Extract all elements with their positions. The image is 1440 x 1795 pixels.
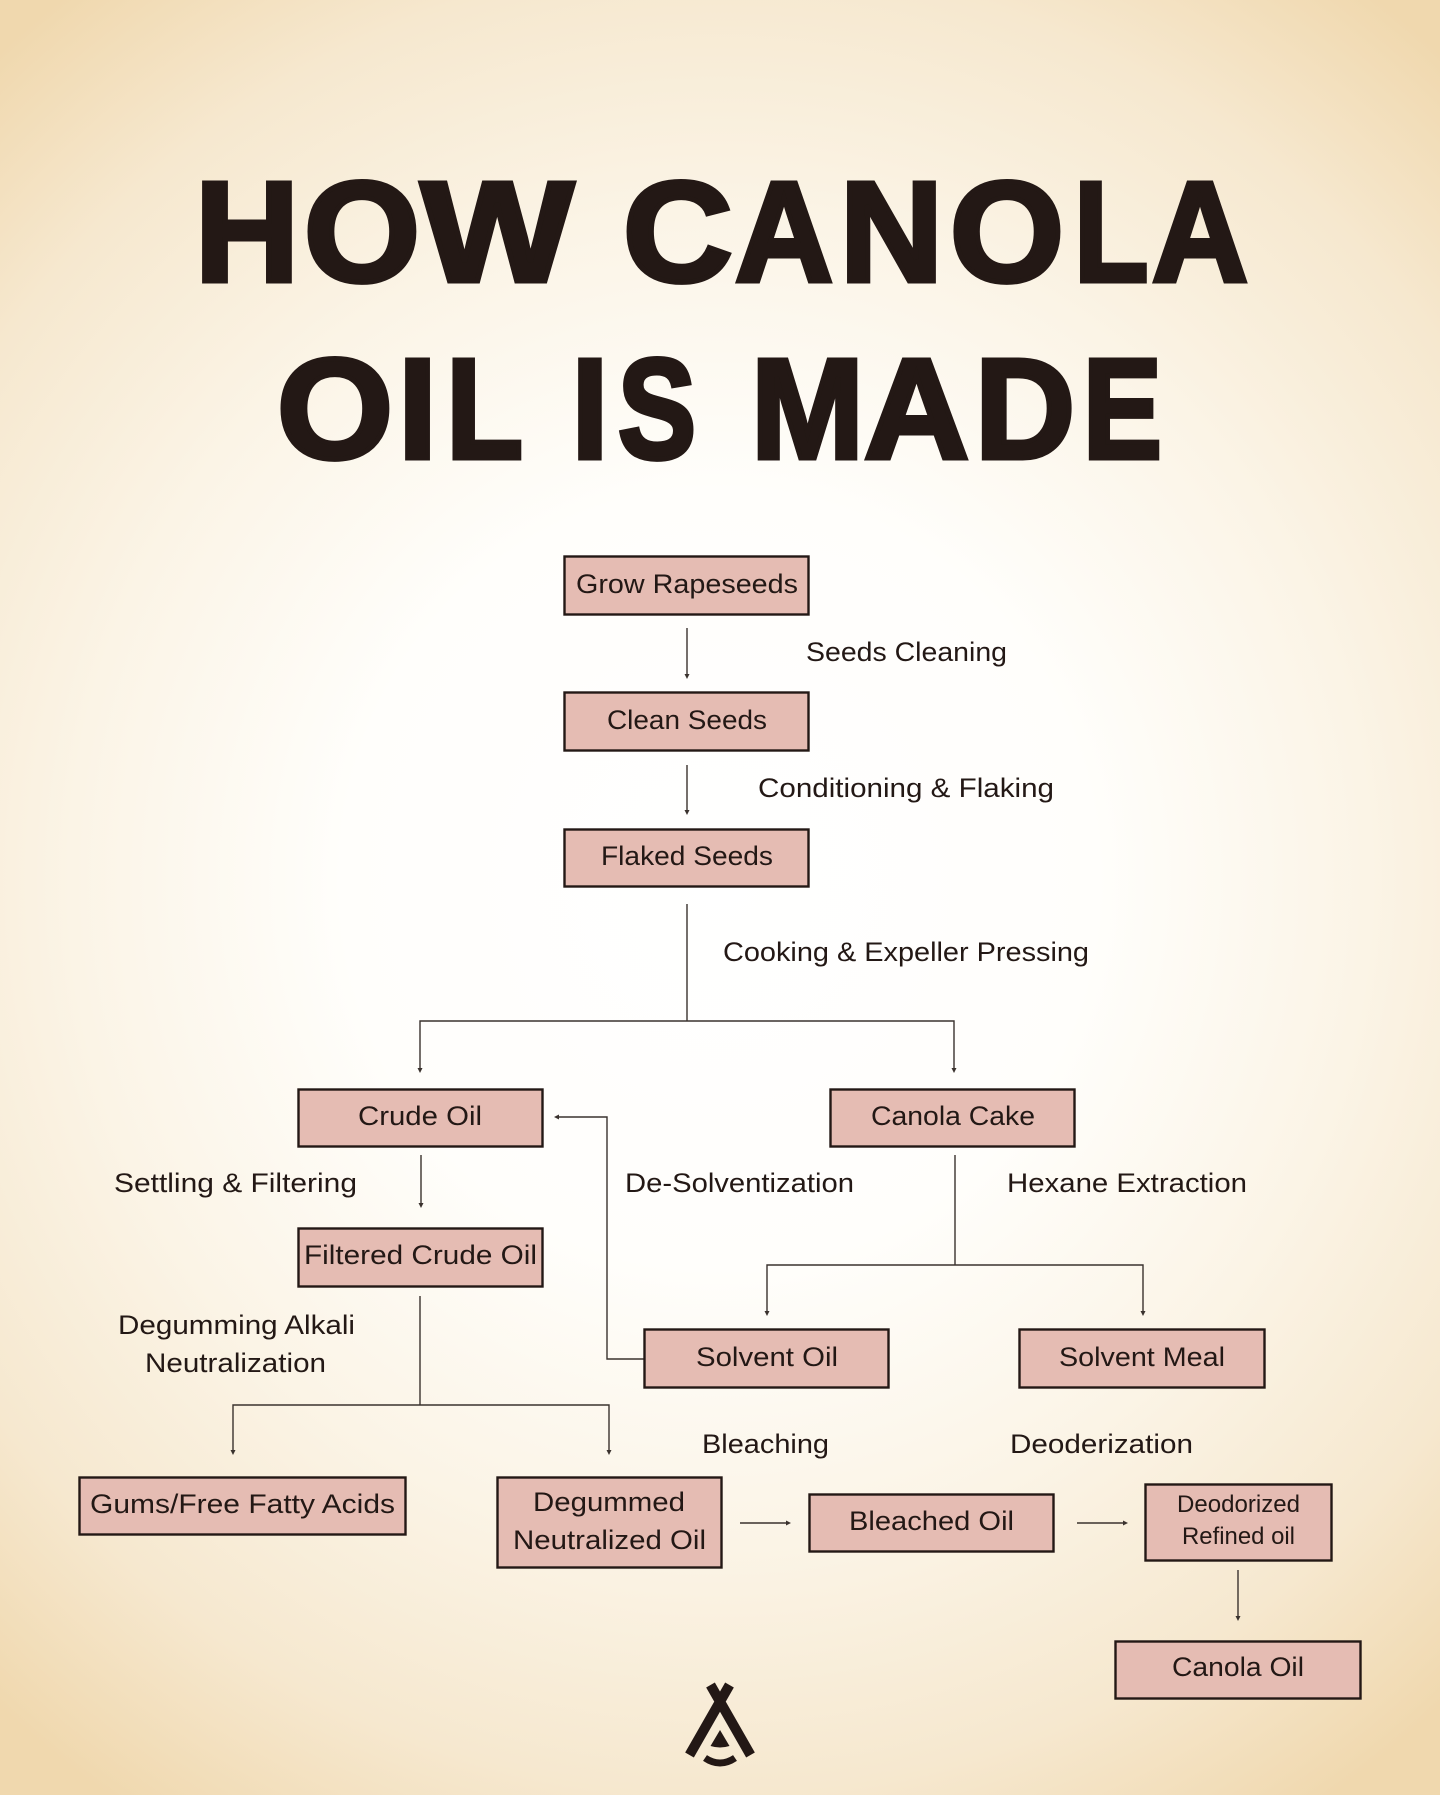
title: D (975, 330, 1075, 489)
label: Degumming Alkali Neutralization (118, 1310, 355, 1378)
title: N (840, 153, 943, 312)
box: Degummed Neutralized Oil: Degummed (533, 1487, 685, 1517)
box: Crude Oil (298, 1090, 542, 1146)
arrow: clean to flaked (684, 765, 690, 815)
box: Crude Oil: Crude Oil (358, 1101, 482, 1131)
box: Canola Cake: Canola Cake (871, 1101, 1035, 1131)
box: Solvent Meal (1020, 1330, 1264, 1388)
box: Solvent Meal: Solvent Meal (1059, 1342, 1225, 1372)
box: Canola Cake (830, 1090, 1074, 1146)
title: A (735, 153, 833, 312)
title: C (623, 153, 732, 312)
box: Flaked Seeds: Flaked Seeds (601, 841, 773, 871)
box: Deodorized Refined oil: Deodorized (1177, 1491, 1300, 1518)
box: Solvent Oil: Solvent Oil (696, 1342, 838, 1372)
title: S (618, 330, 696, 489)
box: Degummed Neutralized Oil (498, 1478, 722, 1568)
title: L (1074, 153, 1148, 312)
box: Filtered Crude Oil (298, 1228, 542, 1286)
label: Bleaching: Bleaching (702, 1429, 829, 1459)
box: Gums/Free Fatty Acids (80, 1478, 406, 1534)
icon: tipi logo (690, 1685, 750, 1763)
title: E (1083, 330, 1162, 489)
box: Clean Seeds (564, 692, 808, 750)
box: Degummed Neutralized Oil: Neutralized Oil (513, 1525, 706, 1555)
arrow: crude to filtered (418, 1155, 424, 1208)
title: A (1152, 153, 1248, 312)
title: I (572, 330, 608, 489)
box: Canola Oil: Canola Oil (1172, 1652, 1304, 1682)
title: A (864, 330, 969, 489)
box: Grow Rapeseeds: Grow Rapeseeds (576, 569, 798, 599)
arrow: degummed to bleached (740, 1520, 791, 1526)
arrow: solvent oil to crude oil (554, 1114, 644, 1359)
label: Conditioning & Flaking: Conditioning & Flaking (758, 773, 1054, 803)
label: Degumming Alkali Neutralization: Degumming Alkali (118, 1310, 355, 1340)
label: De-Solventization: De-Solventization (625, 1168, 854, 1198)
title: O (304, 153, 420, 312)
label: Deoderization: Deoderization (1010, 1429, 1193, 1459)
box: Bleached Oil (810, 1494, 1054, 1552)
title: M (751, 330, 864, 489)
title: O (950, 153, 1064, 312)
title: I (398, 330, 437, 489)
title: L (446, 330, 521, 489)
label: Cooking & Expeller Pressing: Cooking & Expeller Pressing (723, 937, 1089, 967)
box: Deodorized Refined oil: Refined oil (1182, 1523, 1295, 1550)
box: Canola Oil (1116, 1642, 1360, 1698)
box: Grow Rapeseeds (564, 556, 808, 614)
title: O (277, 330, 393, 489)
box: Clean Seeds: Clean Seeds (607, 705, 767, 735)
connector: canola cake split (764, 1155, 1146, 1316)
title: H (195, 153, 299, 312)
arrow: bleached to deodorized (1077, 1520, 1128, 1526)
label: Seeds Cleaning: Seeds Cleaning (806, 637, 1007, 667)
label: Hexane Extraction: Hexane Extraction (1007, 1168, 1247, 1198)
label: Settling & Filtering: Settling & Filtering (114, 1168, 357, 1198)
box: Deodorized Refined oil (1146, 1484, 1332, 1560)
connector: filtered crude oil split (230, 1296, 612, 1455)
title: W (421, 153, 574, 312)
box: Filtered Crude Oil: Filtered Crude Oil (304, 1240, 537, 1270)
box: Flaked Seeds (564, 830, 808, 886)
label: Degumming Alkali Neutralization: Neutralization (145, 1348, 326, 1378)
box: Gums/Free Fatty Acids: Gums/Free Fatty Acids (90, 1489, 395, 1519)
arrow: deodorized to canola oil (1236, 1570, 1240, 1621)
connector: flaked seeds split (418, 904, 956, 1073)
box: Solvent Oil (644, 1330, 888, 1388)
arrow: grow to clean (684, 628, 690, 679)
box: Bleached Oil: Bleached Oil (849, 1506, 1014, 1536)
title (195, 153, 1248, 489)
